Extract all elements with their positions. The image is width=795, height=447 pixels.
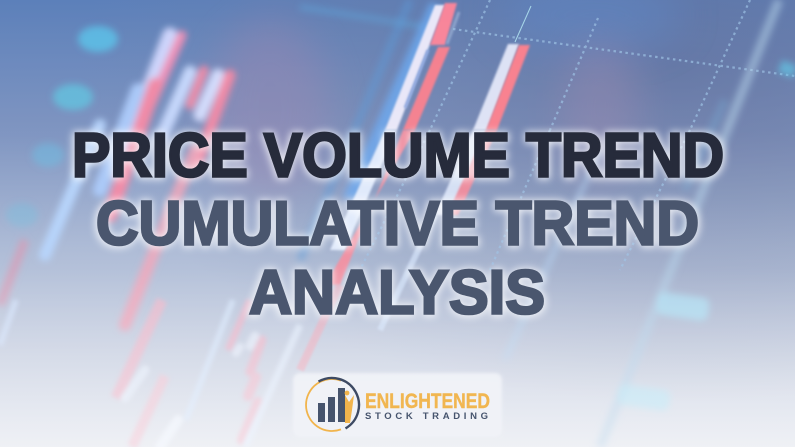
title: price volume trend: PRICE VOLUME TREND xyxy=(72,122,724,190)
text glow: ANALYSIS xyxy=(248,259,546,328)
logo text: enlightened: ENLIGHTENED xyxy=(365,390,490,413)
chart: blurred left candlesticks xyxy=(0,26,230,325)
subtitle: cumulative trend: CUMULATIVE TREND xyxy=(96,190,699,258)
subtitle: analysis: ANALYSIS xyxy=(249,258,545,328)
chart: blurred right candlesticks xyxy=(505,0,795,447)
text glow: PRICE VOLUME TREND xyxy=(71,122,725,191)
chart: dotted grid lines xyxy=(360,0,795,270)
logo text: stock trading: STOCK TRADING xyxy=(365,411,488,422)
text glow xyxy=(71,122,725,328)
text glow: CUMULATIVE TREND xyxy=(95,190,700,259)
chart: lower left fading candlesticks xyxy=(0,300,300,447)
icon: logo circle with bars and figure xyxy=(306,378,359,431)
logo panel xyxy=(293,373,502,437)
chart: sharp central candlesticks xyxy=(300,0,531,370)
